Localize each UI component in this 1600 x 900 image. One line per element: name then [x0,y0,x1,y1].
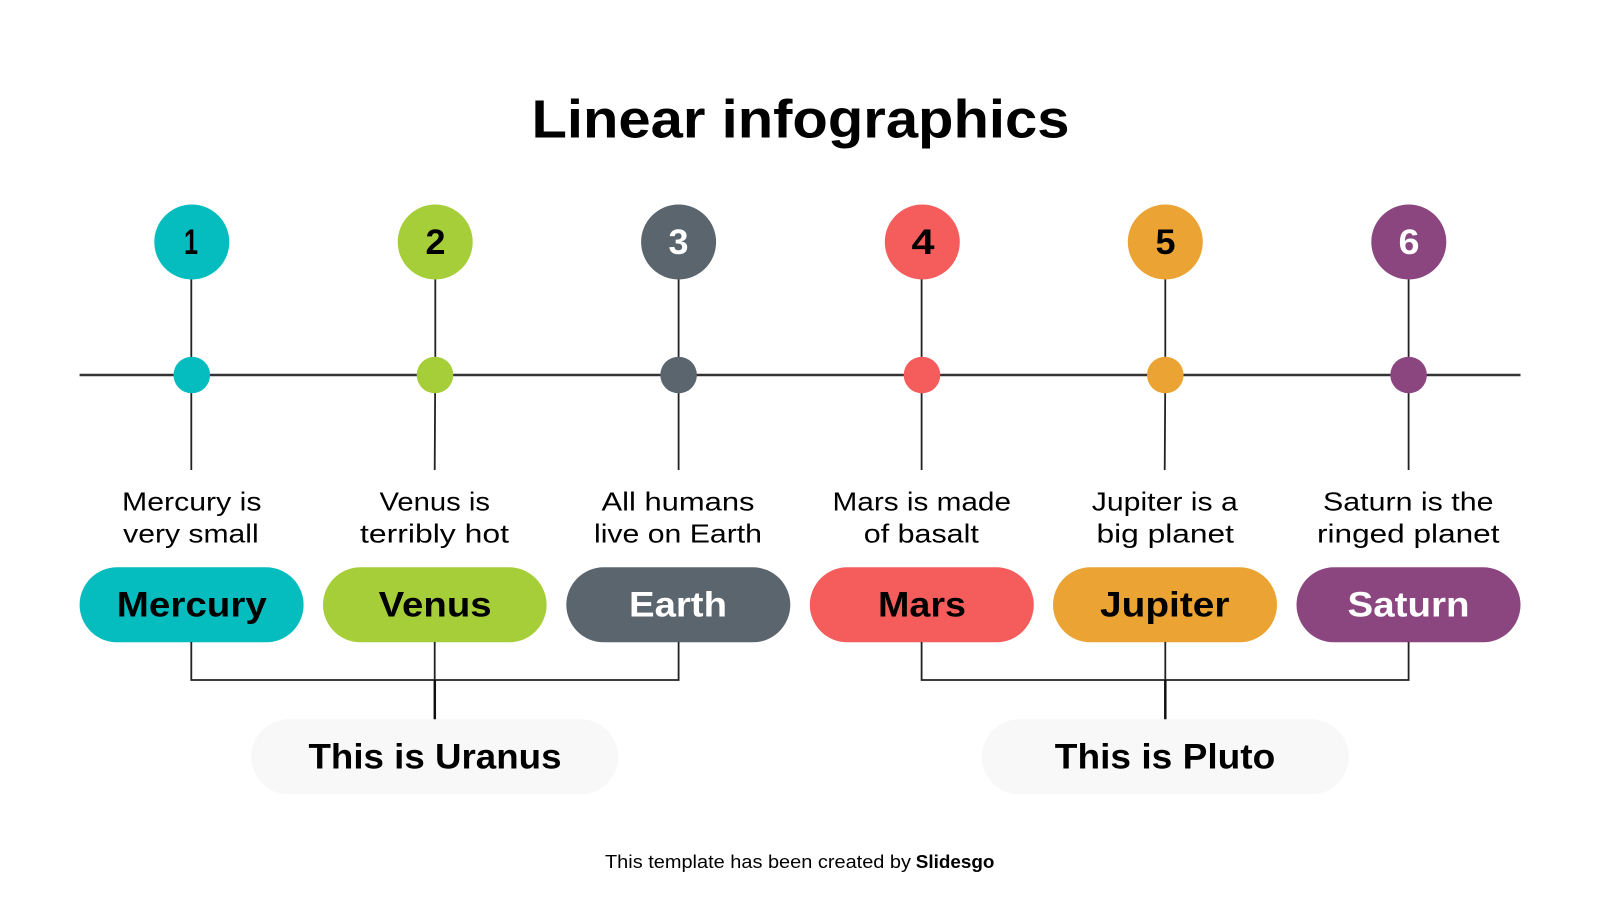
description: Mars: of basalt [864,519,980,549]
group label: This is Pluto: This is Pluto [1055,737,1275,776]
number badge 6 [1371,204,1446,280]
group label: This is Pluto [982,719,1349,794]
number badge 6: 6 [1398,223,1420,262]
column 1: Mercury [80,204,304,642]
description: Venus: terribly hot [360,519,510,549]
description: Mercury [122,487,262,549]
bracket connector: Mercury, Venus, Earth to Uranus [191,642,679,720]
description: Earth: All humans [602,487,754,517]
column 5: Jupiter [1053,204,1277,642]
description: Saturn: Saturn is the [1323,487,1494,517]
timeline dot 6 [1390,357,1427,393]
pill: Mars [810,567,1034,642]
number badge 2: 2 [426,223,446,262]
number badge 3: 3 [668,223,688,262]
number badge 1 [154,204,229,280]
pill: Jupiter: Jupiter [1100,586,1230,625]
timeline dot 2 [417,357,453,393]
description: Saturn [1317,487,1500,549]
description: Jupiter [1092,487,1238,549]
column 6: Saturn [1296,204,1520,642]
description: Venus [360,487,510,549]
description: Venus: Venus is [380,487,490,517]
number badge 2 [398,204,473,280]
timeline dot 5 [1147,357,1184,393]
bracket connector: Mars, Jupiter, Saturn to Pluto [922,642,1409,720]
number badge 3 [641,204,716,280]
number badge 4: 4 [912,223,935,262]
description: Mars [832,487,1011,549]
column 3: Earth [566,204,790,642]
timeline dot 1 [174,357,210,393]
number badge 1: 1 [184,223,198,262]
pill: Mars: Mars [878,586,966,625]
footer credit: Slidesgo [916,852,994,872]
pill: Saturn [1296,567,1520,642]
group label: This is Uranus [251,719,618,794]
timeline axis [80,374,1521,376]
title: Linear infographics [532,90,1070,150]
pill: Saturn: Saturn [1348,586,1470,625]
description: Jupiter: big planet [1096,519,1235,549]
description: Mercury: Mercury is [122,487,262,517]
group label: This is Uranus: This is Uranus [308,737,562,776]
pill: Mercury: Mercury [117,586,267,625]
description: Mars: Mars is made [832,487,1011,517]
number badge 4 [885,204,960,280]
description: Earth [594,487,762,549]
pill: Venus: Venus [379,586,492,625]
pill: Mercury [80,567,304,642]
description: Jupiter: Jupiter is a [1092,487,1238,517]
pill: Earth [566,567,790,642]
timeline dot 3 [660,357,697,393]
column 2: Venus [323,204,547,642]
timeline dot 4 [904,357,940,393]
column 4: Mars [810,204,1034,642]
description: Earth: live on Earth [594,519,762,549]
description: Mercury: very small [123,519,259,549]
pill: Venus [323,567,547,642]
description: Saturn: ringed planet [1317,519,1500,549]
number badge 5: 5 [1156,223,1176,262]
pill: Jupiter [1053,567,1277,642]
footer credit: This template has been created by [605,852,911,872]
number badge 5 [1128,204,1203,280]
pill: Earth: Earth [629,586,727,625]
